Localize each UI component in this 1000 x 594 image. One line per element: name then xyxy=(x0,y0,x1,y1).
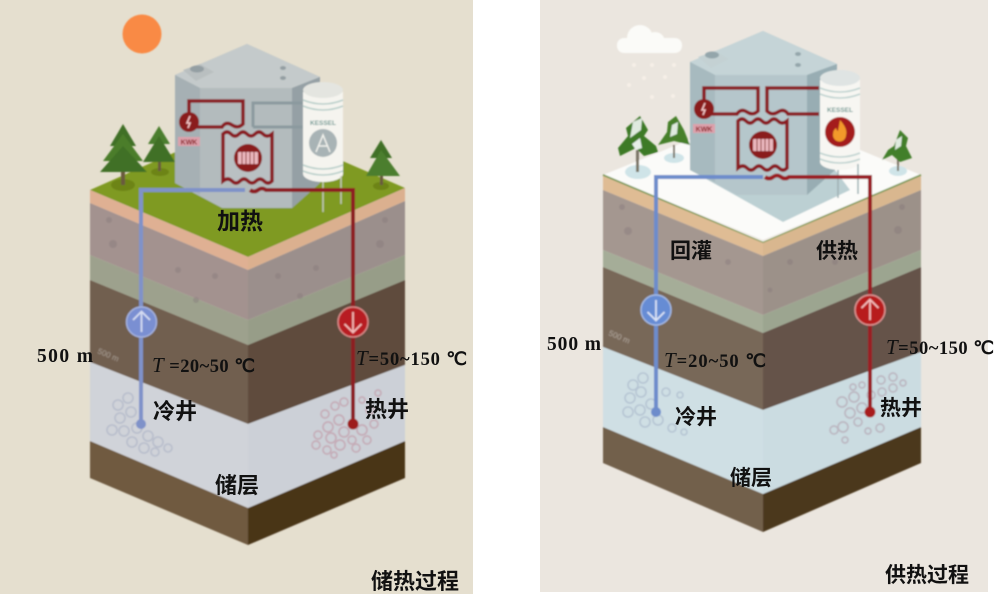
dark rock layer xyxy=(603,267,921,410)
panel: heat supply process xyxy=(540,0,994,592)
icon: tree left large xyxy=(100,124,147,191)
soil pebbles xyxy=(106,217,388,303)
snowflakes xyxy=(627,63,676,99)
icon: sun xyxy=(122,14,162,54)
label: cold well temperature: T =20~50 ℃ xyxy=(152,353,255,377)
storage tank xyxy=(820,70,860,198)
icon: power generator xyxy=(694,99,714,119)
icon: tree right xyxy=(366,140,400,190)
illustration: supply ground block xyxy=(603,25,921,532)
building xyxy=(175,44,320,208)
icon: radiator xyxy=(234,144,262,172)
label: reservoir: 储层 xyxy=(215,473,259,498)
icon: radiator xyxy=(749,131,777,159)
cold pipe xyxy=(651,177,763,417)
soil pebbles xyxy=(619,204,905,292)
small depth label: 500 m xyxy=(607,329,632,346)
bottom rock layer xyxy=(90,441,405,545)
reservoir layer xyxy=(603,347,921,494)
green clay layer xyxy=(603,250,921,333)
icon: down arrow cold pipe xyxy=(641,295,671,325)
icon: cloud xyxy=(617,25,682,53)
hot pipe xyxy=(765,176,876,418)
icon: snowy tree right xyxy=(882,130,912,176)
soil layer xyxy=(90,201,405,320)
icon: tree left small xyxy=(143,126,175,176)
label: heat supply: 供热 xyxy=(816,240,858,263)
hot well rock pattern xyxy=(830,373,906,443)
icon: flame xyxy=(825,117,855,147)
label: KWK tag: KWK xyxy=(181,140,197,146)
hot pipe xyxy=(250,188,358,430)
hot well rock pattern xyxy=(312,390,381,458)
grass edge xyxy=(603,175,921,243)
icon: up arrow hot pipe xyxy=(855,295,885,325)
icon: up arrow cold pipe xyxy=(126,307,156,337)
illustration: storage ground block xyxy=(90,14,405,545)
icon: down arrow hot pipe xyxy=(338,307,368,337)
tan layer xyxy=(603,176,921,256)
panel caption: 储热过程 xyxy=(371,569,459,594)
soil layer xyxy=(603,190,921,315)
icon: snowy tree left small xyxy=(658,116,690,163)
tan layer xyxy=(90,188,405,270)
label: hot well temperature: T=50~150 ℃ xyxy=(886,335,994,359)
green clay layer xyxy=(90,255,405,345)
label: KESSEL: KESSEL xyxy=(310,120,336,127)
bottom rock layer xyxy=(603,427,921,532)
label: reinjection: 回灌 xyxy=(670,240,712,263)
label: cold well: 冷井 xyxy=(153,399,197,424)
snow surface xyxy=(603,110,921,240)
dark rock layer xyxy=(90,280,405,424)
building xyxy=(690,31,850,222)
cold well rock pattern xyxy=(107,393,172,456)
grass surface xyxy=(90,120,405,257)
label: reservoir: 储层 xyxy=(730,467,772,490)
label: KWK tag: KWK xyxy=(696,126,712,134)
icon: snowy tree left large xyxy=(618,116,658,179)
icon: tank gauge xyxy=(309,129,337,157)
panel caption: 供热过程 xyxy=(885,564,969,587)
storage tank xyxy=(303,82,343,212)
label: KESSEL: KESSEL xyxy=(827,107,853,114)
label: depth: 500 m xyxy=(547,334,601,355)
label: depth: 500 m xyxy=(37,346,93,367)
label: KWK tag xyxy=(178,137,200,146)
label: hot well temperature: T=50~150 ℃ xyxy=(356,346,467,370)
icon: power generator xyxy=(179,112,199,132)
panel background left xyxy=(0,0,473,594)
reservoir layer xyxy=(90,362,405,508)
label: heating: 加热 xyxy=(217,208,263,234)
small depth label: 500 m xyxy=(96,347,121,364)
label: cold well: 冷井 xyxy=(675,406,717,429)
cold well rock pattern xyxy=(623,373,687,435)
label: cold well temperature: T=20~50 ℃ xyxy=(664,348,766,372)
label: KWK tag xyxy=(693,124,715,134)
label: hot well: 热井 xyxy=(880,397,922,420)
panel background right xyxy=(540,0,988,592)
panel: heat storage process xyxy=(0,0,473,594)
label: hot well: 热井 xyxy=(365,397,409,422)
cold pipe xyxy=(136,190,245,429)
